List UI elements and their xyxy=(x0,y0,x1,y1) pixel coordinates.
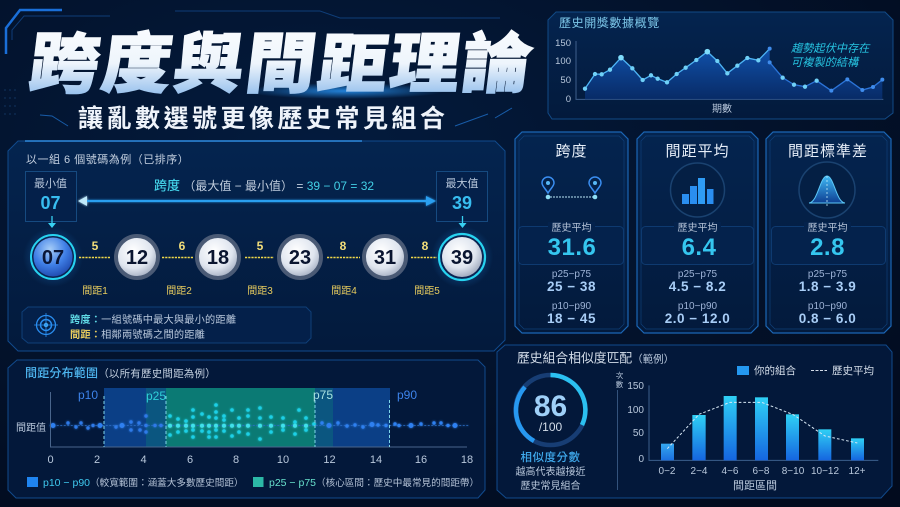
gaps between balls: 間距4 xyxy=(331,285,357,297)
x axis ticks: 4 xyxy=(140,454,147,466)
y axis title xyxy=(616,370,624,490)
annotation: 趨勢起伏中存在 xyxy=(791,42,871,55)
y axis ticks: 100 xyxy=(627,405,644,416)
x axis ticks: 14 xyxy=(370,454,382,466)
average block: 歷史平均 xyxy=(678,222,718,234)
p10-p90 band xyxy=(104,388,390,447)
average block: 31.6 xyxy=(548,234,596,261)
span definition: 跨度：一組號碼中最大與最小的距離 xyxy=(70,313,236,326)
panel: similarity xyxy=(497,345,892,498)
panel: history overview xyxy=(548,12,893,119)
x axis labels: 4−6 xyxy=(722,466,739,477)
average block xyxy=(642,222,754,264)
max value box xyxy=(436,172,488,228)
percentile ranges: p25−p75 xyxy=(678,269,718,280)
axes xyxy=(50,392,467,447)
percentile ranges: p10−p90 xyxy=(552,301,592,312)
y axis labels xyxy=(555,38,571,105)
card title: 間距標準差 xyxy=(788,143,868,160)
y axis ticks xyxy=(627,381,644,465)
x axis title: 間距區間 xyxy=(733,479,777,492)
icon: two pins xyxy=(542,177,601,199)
max value box: 39 xyxy=(452,193,472,213)
card: span xyxy=(515,132,628,333)
average block: 6.4 xyxy=(682,234,717,261)
gauge xyxy=(516,375,586,445)
x axis labels: 0−2 xyxy=(659,466,676,477)
percentile ranges: 4.5 − 8.2 xyxy=(669,279,726,294)
similarity note xyxy=(516,465,586,492)
gaps between balls: 間距3 xyxy=(247,285,273,297)
percentile ranges: 1.8 − 3.9 xyxy=(799,279,856,294)
ball 31 xyxy=(364,236,406,278)
ball 39 xyxy=(431,226,493,288)
y axis ticks: 50 xyxy=(633,428,644,439)
percentile ranges: p25−p75 xyxy=(808,269,848,280)
ball 23 xyxy=(279,236,321,278)
y axis ticks: 0 xyxy=(638,454,644,465)
percentile ranges: 25 − 38 xyxy=(547,279,596,294)
chart legend: 歷史平均 xyxy=(832,365,874,377)
span formula: 跨度 （最大值 − 最小值） = 39 − 07 = 32 xyxy=(154,178,374,193)
panel: example numbers xyxy=(8,141,505,351)
gaps between balls: 5 xyxy=(92,239,99,253)
x axis label: 期數 xyxy=(712,102,732,115)
gaps between balls: 間距2 xyxy=(166,285,192,297)
x axis labels: 2−4 xyxy=(691,466,708,477)
average block: 2.8 xyxy=(810,234,845,261)
line chart xyxy=(576,41,883,99)
x axis ticks: 2 xyxy=(94,454,100,466)
min value box: 07 xyxy=(40,193,61,213)
max value box: 最大值 xyxy=(446,176,478,190)
example heading: 以一組 6 個號碼為例（已排序） xyxy=(26,152,189,166)
percentile markers: p75 xyxy=(313,388,333,402)
min value box: 最小值 xyxy=(34,177,67,190)
legend p25-p75: p25 − p75（核心區間：歷史中最常見的間距帶） xyxy=(269,477,479,489)
p25-p75 band xyxy=(146,388,333,447)
dot strip xyxy=(50,405,468,439)
x axis ticks: 10 xyxy=(277,454,289,466)
distribution heading: 間距分布範圍（以所有歷史間距為例） xyxy=(25,365,216,380)
percentile ranges xyxy=(665,269,730,326)
ball 39: 39 xyxy=(451,247,473,269)
percentile ranges: p10−p90 xyxy=(678,301,718,312)
gaps between balls: 間距1 xyxy=(82,285,108,297)
x axis labels: 10−12 xyxy=(811,466,839,477)
percentile ranges: p25−p75 xyxy=(552,269,592,280)
x axis ticks: 12 xyxy=(323,454,336,466)
card: gap mean xyxy=(637,132,758,333)
percentile ranges: 18 − 45 xyxy=(547,311,596,326)
ball 07 xyxy=(23,227,83,287)
average block xyxy=(772,222,886,264)
y axis labels: 100 xyxy=(555,56,571,67)
heading: history overview: 歷史開獎數據概覽 xyxy=(559,15,660,30)
x axis ticks: 6 xyxy=(187,454,193,466)
y axis labels: 50 xyxy=(560,75,571,86)
percentile ranges: p10−p90 xyxy=(808,301,848,312)
gaps between balls xyxy=(79,239,440,297)
similarity heading: 歷史組合相似度匹配（範例） xyxy=(517,350,674,366)
percentile ranges xyxy=(547,269,596,326)
percentile ranges xyxy=(799,269,856,326)
x axis labels xyxy=(659,466,866,477)
y label: 間距值 xyxy=(16,421,46,434)
percentile markers: p90 xyxy=(397,388,417,402)
card: gap standard deviation xyxy=(766,132,891,333)
bar chart xyxy=(649,385,878,460)
x axis labels: 8−10 xyxy=(782,466,805,477)
similarity score label: 相似度分數 xyxy=(520,450,580,464)
ball 23: 23 xyxy=(289,247,311,269)
percentile markers xyxy=(78,388,417,447)
icon: bar chart xyxy=(670,163,724,217)
gaps between balls: 6 xyxy=(179,239,186,253)
chart legend xyxy=(737,364,874,377)
similarity note: 歷史常見組合 xyxy=(520,479,580,492)
percentile markers: p10 xyxy=(78,388,98,402)
ball 12: 12 xyxy=(126,247,148,269)
x axis ticks xyxy=(47,454,473,466)
percentile ranges: 2.0 − 12.0 xyxy=(665,311,730,326)
gaps between balls: 8 xyxy=(340,239,347,253)
average block xyxy=(518,222,624,264)
min value box xyxy=(26,172,76,228)
gaps between balls: 8 xyxy=(422,239,429,253)
span arrow xyxy=(78,196,436,206)
card title: 跨度 xyxy=(555,143,588,160)
chart legend: 你的組合 xyxy=(754,364,796,377)
main title: 跨度與間距理論 xyxy=(25,11,541,106)
gaps between balls: 間距5 xyxy=(414,285,440,297)
y axis title: 數 xyxy=(616,379,624,389)
title banner xyxy=(5,10,541,126)
x axis ticks: 16 xyxy=(415,454,427,466)
legend p10-p90: p10 − p90（較寬範圍：涵蓋大多數歷史間距） xyxy=(43,477,244,489)
x axis labels: 12+ xyxy=(849,466,866,477)
ball 12 xyxy=(116,236,158,278)
panel: gap distribution xyxy=(8,360,485,498)
icon: target xyxy=(34,313,58,337)
gap definition: 間距：相鄰兩號碼之間的距離 xyxy=(70,328,205,341)
x axis ticks: 8 xyxy=(233,454,239,466)
average block: 歷史平均 xyxy=(552,222,592,234)
ball 07: 07 xyxy=(42,247,64,269)
ball 31: 31 xyxy=(374,247,396,269)
ball 18 xyxy=(197,236,239,278)
subtitle: 讓亂數選號更像歷史常見組合 xyxy=(78,99,449,135)
average block: 歷史平均 xyxy=(808,222,848,234)
ball 18: 18 xyxy=(207,247,229,269)
x axis ticks: 18 xyxy=(461,454,473,466)
y axis labels: 150 xyxy=(555,38,571,49)
gauge: 86 xyxy=(534,390,567,423)
gaps between balls: 5 xyxy=(257,239,264,253)
y axis labels: 0 xyxy=(566,94,571,105)
panel: history overview: 可複製的結構 xyxy=(791,56,860,69)
x axis ticks: 0 xyxy=(47,454,54,466)
card title: 間距平均 xyxy=(665,143,730,160)
y axis title: 次 xyxy=(616,370,624,380)
x axis labels: 6−8 xyxy=(753,466,770,477)
definitions box xyxy=(22,307,311,343)
y axis ticks: 150 xyxy=(627,381,644,392)
percentile ranges: 0.8 − 6.0 xyxy=(799,311,856,326)
gauge: /100 xyxy=(539,420,563,434)
icon: bell curve xyxy=(799,162,855,218)
percentile markers: p25 xyxy=(146,389,166,403)
similarity note: 越高代表越接近 xyxy=(516,465,586,478)
